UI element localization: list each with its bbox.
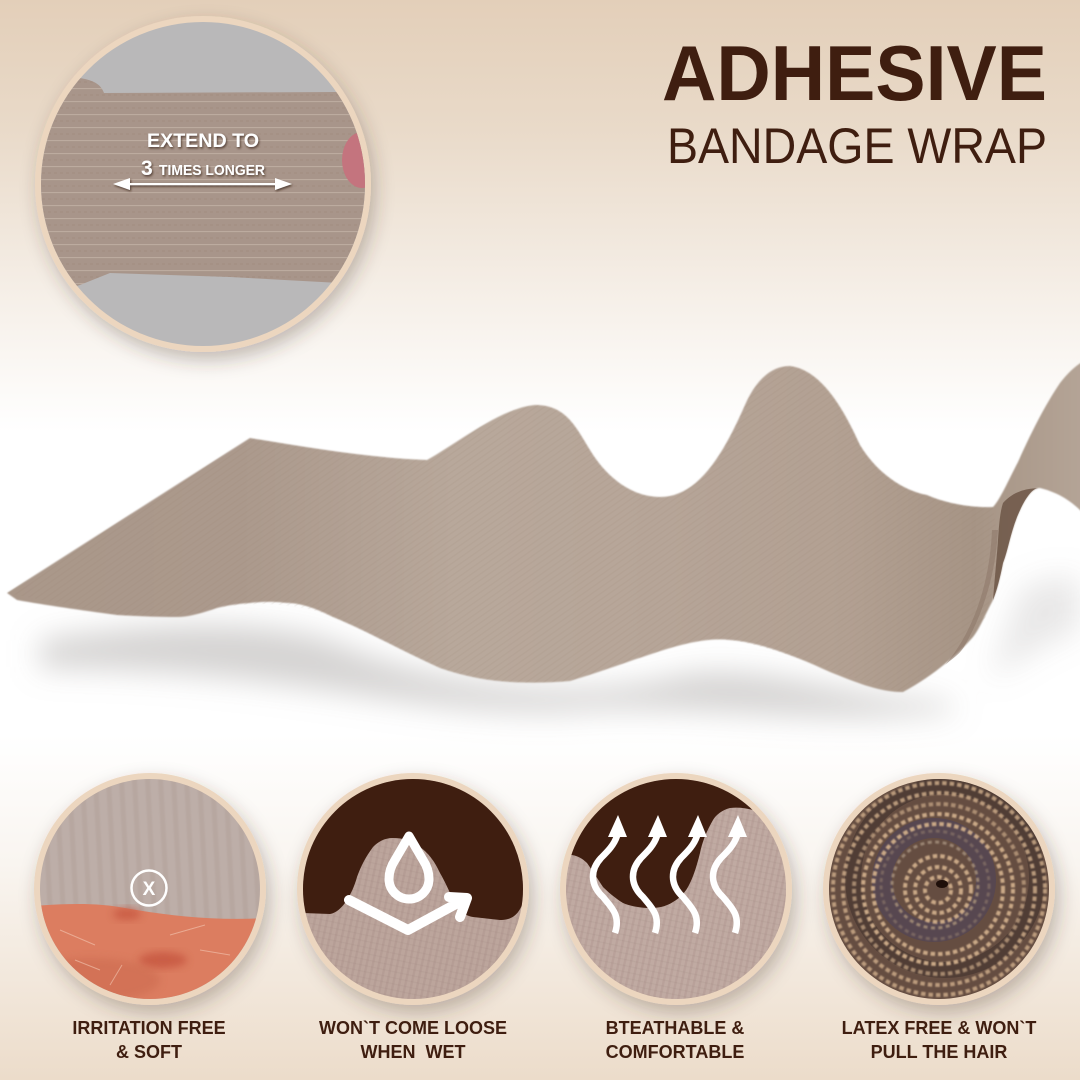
fold shading xyxy=(993,488,1038,600)
bandage shadow xyxy=(40,577,1080,717)
circle frame xyxy=(34,773,266,1005)
circle frame xyxy=(560,773,792,1005)
feature circle: waterproof xyxy=(297,773,529,1005)
grey backdrop xyxy=(41,22,365,346)
feature circle: irritation free xyxy=(20,773,266,1005)
double arrow xyxy=(113,178,292,190)
feature label: won't come loose xyxy=(319,1018,507,1062)
feature label: breathable xyxy=(606,1018,744,1062)
feature circle: rolled bandage xyxy=(823,773,1055,1005)
feature label: irritation free xyxy=(72,1018,226,1062)
icon: x mark xyxy=(132,870,166,906)
icon: x mark: X xyxy=(143,879,156,900)
bandage wave xyxy=(7,362,1080,692)
icon: repel arrow xyxy=(349,897,467,930)
stretch label: EXTEND TO xyxy=(147,131,259,152)
fabric texture xyxy=(560,775,792,1005)
fingertip xyxy=(342,133,365,188)
heading: adhesive: ADHESIVE xyxy=(662,29,1047,117)
feature label: latex free xyxy=(842,1018,1036,1062)
subheading: bandage wrap: BANDAGE WRAP xyxy=(667,118,1047,174)
stretched bandage strip xyxy=(41,78,365,286)
icon: breathable arrows xyxy=(593,815,747,933)
fabric texture xyxy=(34,775,266,1005)
icon: water drop xyxy=(389,836,429,899)
dark backdrop xyxy=(571,779,752,908)
feature label: irritation free: IRRITATION FREE xyxy=(72,1018,226,1038)
feature label: won't come loose: WHEN WET xyxy=(360,1042,466,1062)
callout circle: extend to 3 times longer xyxy=(30,10,382,360)
feature label: breathable: BTEATHABLE & xyxy=(606,1018,744,1038)
title xyxy=(662,29,1047,174)
roll base xyxy=(828,778,1050,1000)
feature label: irritation free: & SOFT xyxy=(116,1042,182,1062)
feature label: latex free: LATEX FREE & WON`T xyxy=(842,1018,1036,1038)
feature label: breathable: COMFORTABLE xyxy=(606,1042,744,1062)
feature label: won't come loose: WON`T COME LOOSE xyxy=(319,1018,507,1038)
roll centre xyxy=(936,880,948,888)
stretch label: 3 xyxy=(141,157,153,180)
stretch label xyxy=(141,131,265,180)
circle frame xyxy=(823,773,1055,1005)
circle frame xyxy=(35,16,371,352)
concentric stitches xyxy=(833,783,1045,995)
feature circle: breathable xyxy=(560,773,792,1005)
circle frame xyxy=(297,773,529,1005)
stretch label: TIMES LONGER xyxy=(159,163,265,179)
dark bands xyxy=(882,828,986,932)
irritated skin xyxy=(41,904,256,999)
dark backdrop xyxy=(297,775,529,920)
feature label: latex free: PULL THE HAIR xyxy=(871,1042,1007,1062)
fabric texture xyxy=(297,775,529,1005)
